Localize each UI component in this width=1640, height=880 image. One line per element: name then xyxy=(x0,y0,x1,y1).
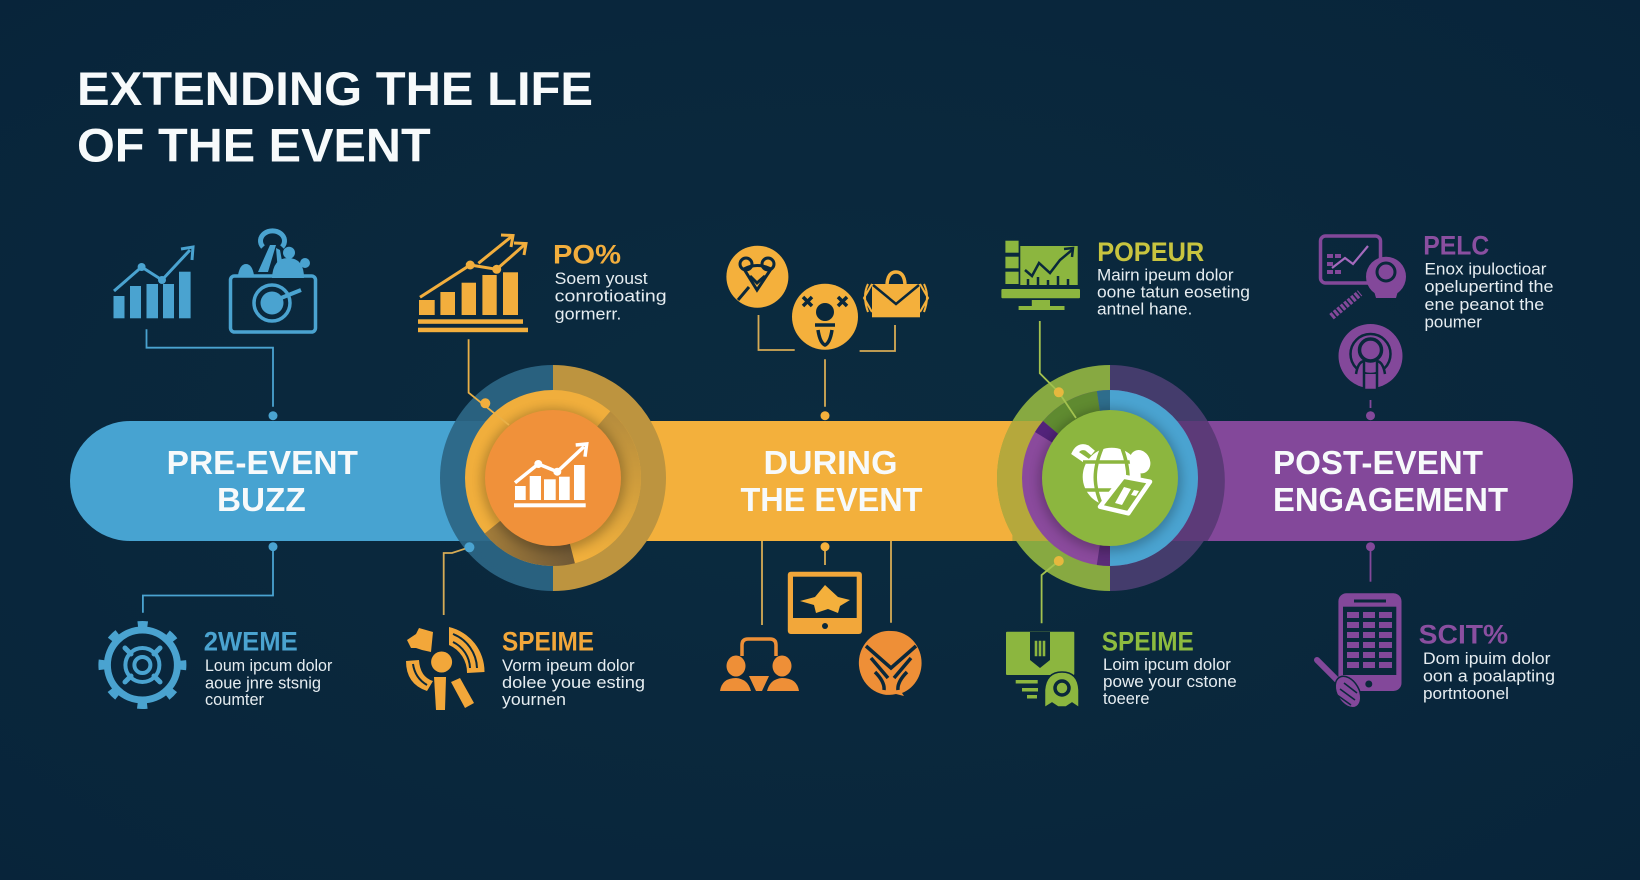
panel: bottom SPEIME green stat xyxy=(1006,556,1237,708)
icon: gold badge with bear face xyxy=(726,246,788,308)
bar label: post-event engagement: POST-EVENT xyxy=(1273,444,1483,481)
text block: SPEIME green body xyxy=(1103,656,1237,708)
text block: POPEUR body xyxy=(1097,267,1250,319)
bar label: pre-event buzz xyxy=(167,444,358,518)
icon: green monitor xyxy=(1001,241,1080,310)
text block: SCIT% body: portntoonel xyxy=(1423,685,1509,703)
connector dot: purple top xyxy=(1366,411,1375,420)
hub: analytics circle xyxy=(440,365,666,591)
icon: orange speech bubble xyxy=(859,631,922,696)
icon: orange broadcast figure xyxy=(406,627,485,710)
icon: purple person badge xyxy=(1338,324,1402,390)
text block: SPEIME green body: Loim ipcum dolor xyxy=(1103,656,1231,674)
title xyxy=(77,62,593,172)
text block: PELC body: poumer xyxy=(1424,313,1482,331)
hub: globe circle xyxy=(997,365,1225,591)
connector dot: during top xyxy=(820,411,830,420)
bar label: post-event engagement: ENGAGEMENT xyxy=(1273,481,1508,518)
connector dot: bottom green hub xyxy=(1054,556,1064,566)
panel: during top icons xyxy=(726,246,928,420)
panel: 2WEME stat xyxy=(101,542,333,709)
icon: white growth chart xyxy=(514,444,587,507)
text block: POPEUR body: Mairn ipeum dolor xyxy=(1097,267,1234,285)
connector: bottom blue xyxy=(143,551,273,613)
panel: SCIT% stat xyxy=(1317,542,1555,712)
icon: gold growth chart xyxy=(418,235,528,332)
icon: purple analytics screen xyxy=(1320,236,1406,317)
bar label: pre-event buzz: PRE-EVENT xyxy=(167,444,358,481)
connector: gold lower xyxy=(444,547,469,615)
text block: PO% body xyxy=(555,270,667,323)
connector dot: blue at hub xyxy=(464,542,474,552)
icon: gold envelope bag xyxy=(864,272,928,317)
text block: SCIT% body: Dom ipuim dolor xyxy=(1423,650,1551,668)
text block: SPEIME orange body xyxy=(502,657,645,709)
connector dot: top blue xyxy=(268,411,278,420)
text block: PELC body: ene peanot the xyxy=(1424,296,1544,314)
icon: green certificate and pencil xyxy=(1006,632,1079,708)
heading: SCIT%: SCIT% xyxy=(1419,619,1508,649)
text block: SPEIME green body: powe your cstone xyxy=(1103,673,1237,691)
connectors: during bottom xyxy=(762,541,891,625)
text block: SCIT% body: oon a poalapting xyxy=(1423,668,1555,686)
panel: bottom SPEIME orange stat xyxy=(406,542,645,710)
panel: POPEUR stat xyxy=(1001,237,1250,418)
icon: purple phone with brush xyxy=(1317,593,1402,712)
text block: SPEIME orange body: dolee youe esting xyxy=(502,674,645,692)
connector: green lower xyxy=(1042,561,1059,623)
panel: during bottom icons xyxy=(720,541,922,696)
bar label: during the event: THE EVENT xyxy=(740,481,922,518)
text block: SPEIME orange body: Vorm ipeum dolor xyxy=(502,657,635,675)
timeline band: post-event segment xyxy=(1110,421,1573,541)
panel: pre-event top icons xyxy=(114,231,316,420)
text block: 2WEME body: Loum ipcum dolor xyxy=(205,657,333,675)
icon: blue bar chart xyxy=(114,247,193,318)
icon: gold badge with bird xyxy=(792,284,858,350)
connector: gold to hub xyxy=(469,339,509,425)
title: EXTENDING THE LIFE xyxy=(77,62,593,115)
connector: purple bottom xyxy=(1370,551,1372,582)
text block: PO% body: conrotioating xyxy=(555,288,667,306)
connector dot: bottom blue xyxy=(268,542,278,551)
icon: blue camera and audience xyxy=(230,231,316,332)
text block: 2WEME body: aoue jnre stsnig xyxy=(205,674,321,692)
text block: POPEUR body: antnel hane. xyxy=(1097,301,1192,319)
heading: SPEIME green: SPEIME xyxy=(1102,627,1194,657)
timeline band: during segment xyxy=(554,421,1110,541)
text block: SCIT% body xyxy=(1423,650,1555,703)
bar label: during the event: DURING xyxy=(764,444,898,481)
connector dot: gold xyxy=(480,398,490,408)
heading: PELC: PELC xyxy=(1423,230,1489,260)
panel: PELC stat xyxy=(1320,230,1554,420)
connector: top blue xyxy=(146,329,273,407)
text block: PELC body xyxy=(1424,260,1554,331)
icon: tablet xyxy=(788,572,862,634)
connector dot: top green hub xyxy=(1054,387,1064,397)
text block: PO% body: Soem youst xyxy=(555,270,648,288)
connectors: during top xyxy=(758,315,895,407)
text block: SPEIME orange body: yournen xyxy=(502,691,566,709)
text block: PELC body: Enox ipuloctioar xyxy=(1424,260,1547,278)
connector dot: purple bottom xyxy=(1366,542,1375,551)
icon: orange group xyxy=(720,639,799,691)
heading: 2WEME: 2WEME xyxy=(204,627,298,657)
icon: blue gear xyxy=(101,624,183,706)
panel: PO% stat xyxy=(418,235,667,425)
connector: purple top xyxy=(1370,400,1372,408)
text block: SPEIME green body: toeere xyxy=(1103,690,1150,708)
heading: POPEUR: POPEUR xyxy=(1097,237,1204,267)
heading: PO%: PO% xyxy=(553,239,621,269)
bar label: during the event xyxy=(740,444,922,518)
text block: 2WEME body xyxy=(205,657,333,709)
icon: white globe and ticket xyxy=(1075,447,1154,513)
heading: SPEIME orange: SPEIME xyxy=(502,627,594,657)
title: OF THE EVENT xyxy=(77,119,431,172)
timeline band: pre-event segment xyxy=(70,421,560,541)
bar label: pre-event buzz: BUZZ xyxy=(217,481,306,518)
text block: 2WEME body: coumter xyxy=(205,691,264,709)
text block: PO% body: gormerr. xyxy=(555,305,621,323)
connector dot: during bottom xyxy=(820,542,830,551)
bar label: post-event engagement xyxy=(1273,444,1508,518)
text block: POPEUR body: oone tatun eoseting xyxy=(1097,283,1250,301)
connector: green to hub xyxy=(1040,321,1076,418)
text block: PELC body: opelupertind the xyxy=(1424,278,1554,296)
